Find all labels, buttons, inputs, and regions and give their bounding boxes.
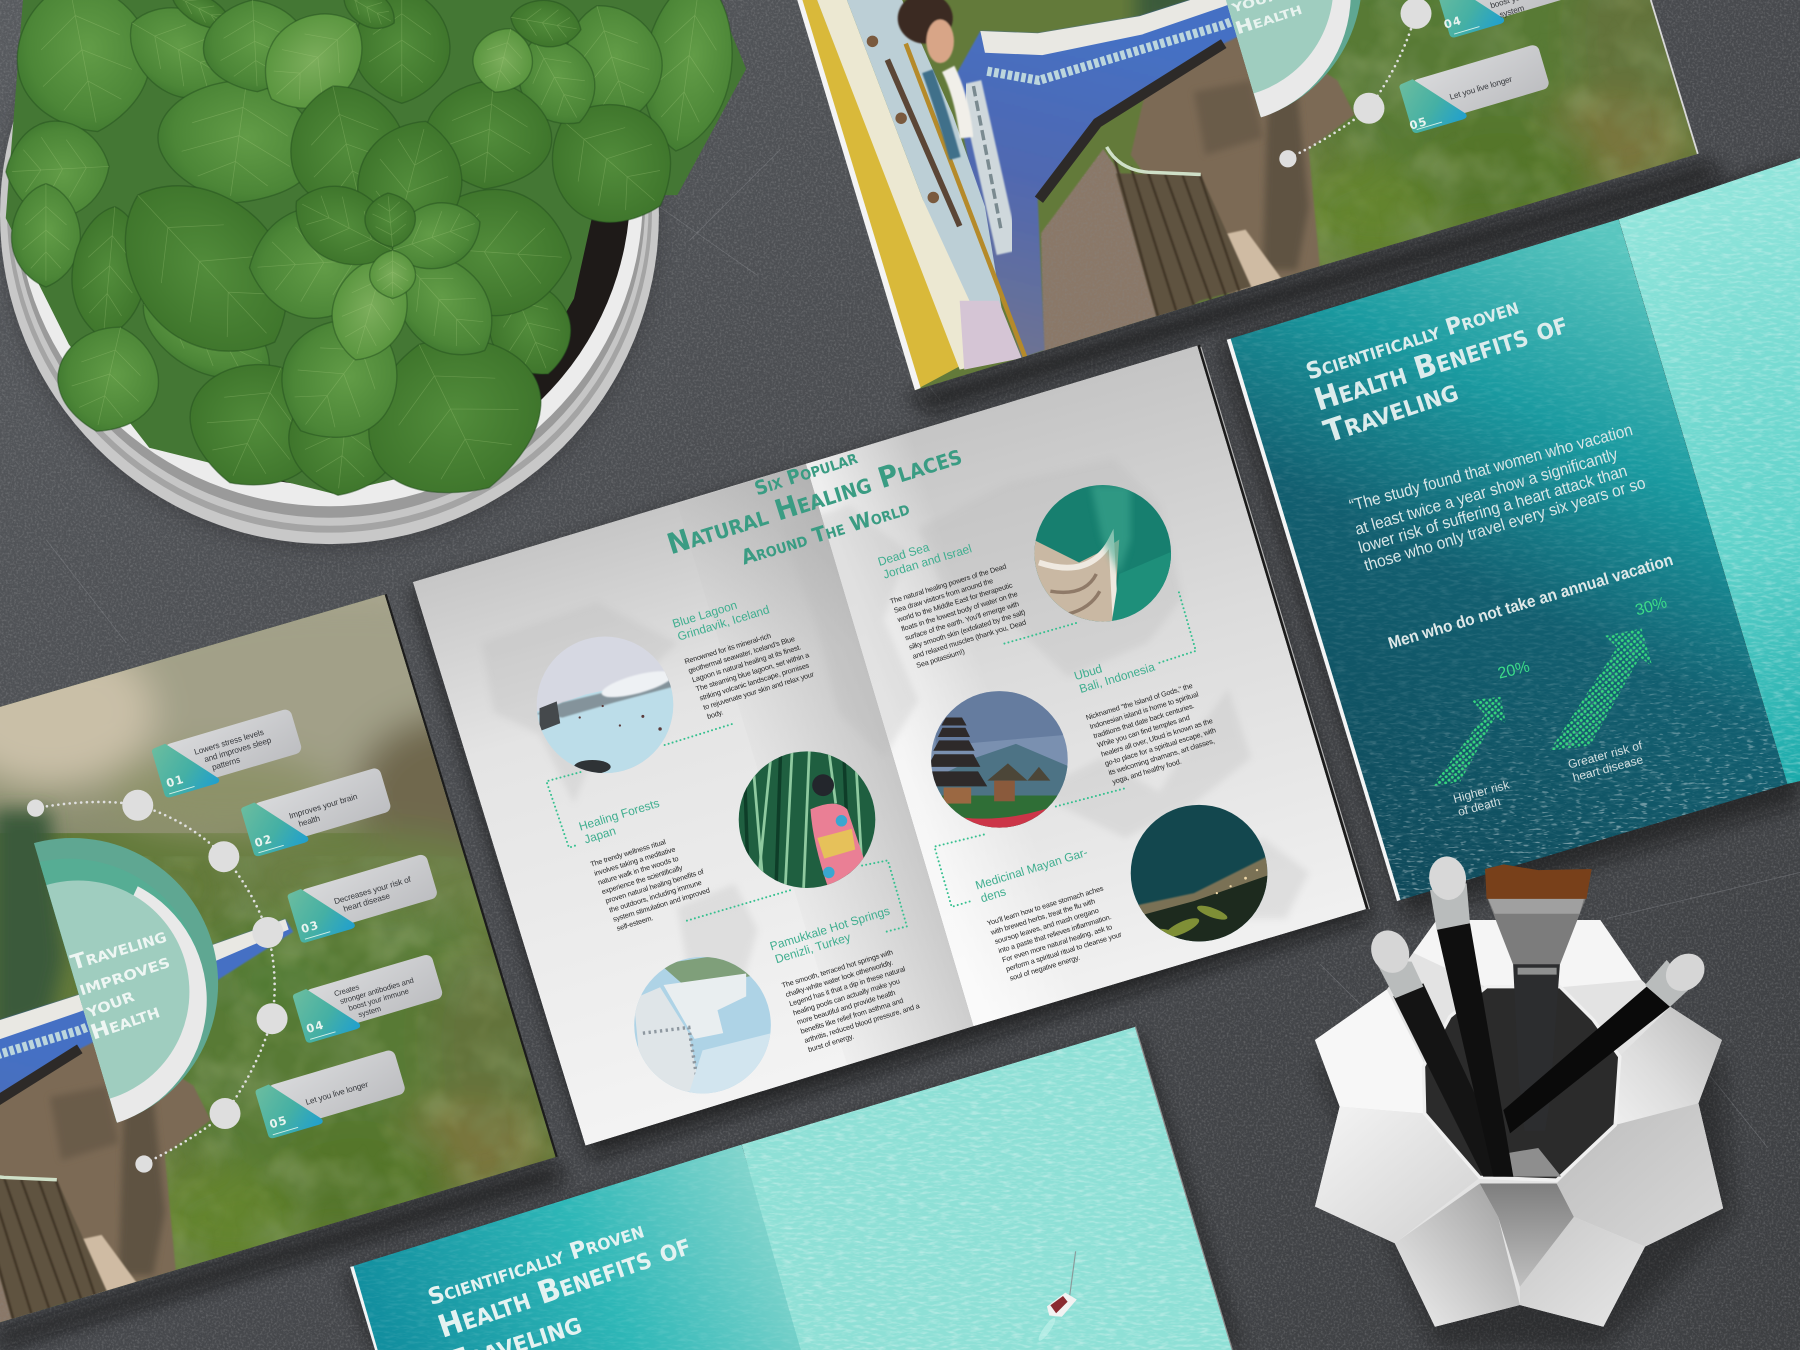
value 30%: 30% <box>1633 593 1669 619</box>
section: Pamukkale: benefits like relief from asthma and <box>799 996 904 1036</box>
card 04 text: stronger antibodies and <box>339 976 415 1006</box>
photo: Pamukkale <box>634 953 771 1096</box>
section: Healing Forests <box>577 796 714 935</box>
photo: train and forest <box>802 0 1697 390</box>
section: Ubud: Ubud <box>1072 661 1104 683</box>
card 01 text <box>164 726 276 790</box>
section: Medicinal Mayan Gardens: with brewed herbs, treat the flu with <box>989 896 1096 937</box>
label greater risk: Greater risk of <box>1566 738 1644 772</box>
heading: Health Benefits of <box>1310 305 1572 418</box>
circle heading: improves <box>76 948 173 1000</box>
card 01 text: and improves sleep <box>203 736 273 764</box>
card 02 text: Improves your brain <box>288 792 358 821</box>
section: Dead Sea: world to the Middle East for therapeutic <box>895 580 1014 624</box>
section: Pamukkale: burst of energy. <box>807 1032 855 1054</box>
section: Blue Lagoon: to rejuvenate your skin and relax your <box>702 669 816 712</box>
page: pale water right page <box>1607 149 1800 792</box>
section: Ubud: healers all over, Ubud is known as the <box>1100 716 1214 759</box>
section: Pamukkale: Pamukkale Hot Springs <box>768 904 891 953</box>
section: Dead Sea: Jordan and Israel <box>881 541 973 582</box>
statistic heading: Men who do not take an annual vacation <box>1386 550 1675 653</box>
section: Pamukkale <box>768 904 925 1056</box>
section: Healing Forests: experience the scientifically <box>600 863 684 896</box>
section: Dead Sea: The natural healing powers of the Dead <box>889 562 1007 606</box>
circle heading: your <box>81 982 137 1023</box>
value 20%: 20% <box>1496 657 1531 683</box>
circle heading: Traveling <box>68 923 169 975</box>
section: Healing Forests: system stimulation and improved <box>612 886 711 924</box>
photo: Ubud, Bali <box>928 690 1070 832</box>
leaves <box>3 0 746 527</box>
section: Pamukkale: arthritis, reduced blood pressure, and a <box>803 1001 922 1045</box>
booklet: center spread, natural healing places <box>412 346 1372 1159</box>
section: Blue Lagoon: Blue Lagoon <box>671 598 739 631</box>
section: Ubud <box>1072 646 1223 788</box>
card 04 text: boost your immune <box>347 986 410 1013</box>
photo: forest and train <box>0 546 624 1350</box>
section: Dead Sea <box>876 528 1032 672</box>
page: teal left page <box>1217 207 1800 918</box>
section: Dead Sea: silky smooth skin (exfoliated by the salt) <box>908 607 1026 652</box>
top spread text: Health <box>1233 0 1305 39</box>
section: Dead Sea: Sea draw visitors from around the <box>893 576 994 615</box>
section: Pamukkale: Legend has it that a dip in these natural <box>788 964 907 1008</box>
section: Blue Lagoon: Renowned for its mineral-rich <box>683 631 772 666</box>
section: Pamukkale: chalky-white water look otherworldly. <box>784 958 894 999</box>
section: Dead Sea: and relaxed muscles (thank you, Dead <box>911 618 1027 661</box>
page: pale water right page <box>735 1022 1240 1350</box>
section: Blue Lagoon <box>671 589 820 723</box>
section: Medicinal Mayan Gardens: You'll learn how to ease stomach aches <box>986 884 1104 928</box>
label higher risk: of death <box>1456 794 1502 819</box>
heading: Scientifically Proven <box>425 1217 647 1311</box>
dotted arrow 20 percent <box>1432 697 1506 786</box>
card 04 text: Creates <box>333 982 360 998</box>
booklet: right teal spread <box>1217 149 1800 918</box>
quote: at least twice a year show a significantly <box>1353 444 1620 539</box>
section: Blue Lagoon: Grindavik, Iceland <box>676 602 771 644</box>
card 02 text: health <box>298 814 321 829</box>
section: Healing Forests: self-esteem. <box>616 913 654 933</box>
section: Ubud: Nicknamed "the Island of Gods," the <box>1085 681 1194 722</box>
section: Ubud: go-to place for a spiritual escape, with <box>1104 725 1217 768</box>
section: Dead Sea: floats in the lowest body of water on the <box>900 589 1019 633</box>
section: Ubud: Indonesian island is home to spiritual <box>1088 689 1200 731</box>
quote <box>1347 420 1648 575</box>
section: Healing Forests: the outdoors, including immune <box>608 878 703 914</box>
card 05 text <box>268 1080 370 1131</box>
circle heading <box>68 923 173 1044</box>
booklet: bottom teal cover with sailboat <box>344 1022 1240 1350</box>
card 02 text <box>253 792 362 850</box>
section: Blue Lagoon: body. <box>706 707 724 721</box>
top spread text <box>1228 0 1558 133</box>
heading: Traveling <box>1319 372 1463 450</box>
section: Healing Forests: involves taking a meditative <box>593 844 676 878</box>
section: Medicinal Mayan Gardens: soursop leaves, and mash oregano <box>993 906 1100 946</box>
top spread text: system <box>1498 4 1526 19</box>
section: Medicinal Mayan Gardens: dens <box>979 884 1008 905</box>
section: Medicinal Mayan Gardens: soul of negative energy. <box>1008 953 1081 983</box>
card 03 text: heart disease <box>342 891 392 914</box>
holder body <box>1315 920 1723 1327</box>
booklet: top train spread <box>797 0 1725 420</box>
photo: Healing Forests <box>738 751 876 890</box>
circle heading: Health <box>87 999 162 1044</box>
photo: Blue Lagoon <box>536 636 675 774</box>
brush <box>1485 864 1592 1131</box>
quote: lower risk of suffering a heart attack than <box>1356 461 1629 557</box>
section: Pamukkale: The smooth, terraced hot springs with <box>781 947 894 990</box>
heading: Health Benefits of <box>434 1226 695 1346</box>
card 03 text: Decreases your risk of <box>333 875 412 906</box>
pot <box>0 0 659 550</box>
section: Blue Lagoon: The steaming blue lagoon, set within a <box>695 650 811 693</box>
section: Healing Forests: Healing Forests <box>577 796 661 834</box>
plant in white pot <box>0 0 746 550</box>
section: Dead Sea: Sea potassium!) <box>915 647 966 670</box>
title: Natural Healing Places <box>663 437 966 561</box>
infographic graphics on top spread <box>1226 0 1561 168</box>
section: Dead Sea: Dead Sea <box>876 540 931 569</box>
photo: Medicinal Mayan Gardens <box>1130 804 1270 944</box>
section: Medicinal Mayan Gardens: perform a spiritual ritual to cleanse your <box>1005 929 1123 973</box>
pen holder with pencils and brush <box>1314 854 1733 1349</box>
section: Healing Forests: Japan <box>582 824 617 846</box>
card 01 text: Lowers stress levels <box>193 728 265 757</box>
heading: Scientifically Proven <box>1303 294 1522 385</box>
card 04 text: system <box>357 1004 382 1019</box>
dotted arrow 30 percent <box>1550 629 1653 751</box>
pencil right <box>1503 946 1712 1133</box>
card 05 text: 05 <box>268 1113 289 1131</box>
dotted connectors <box>546 592 1196 932</box>
section: Healing Forests: nature walk in the woods to <box>597 854 680 887</box>
section: Blue Lagoon: geothermal seawater, Iceland's Blue <box>687 634 796 675</box>
top spread text: 04 <box>1442 13 1464 32</box>
section: Pamukkale: more beautiful and provide health <box>796 988 896 1027</box>
card 04 text: 04 <box>305 1017 326 1036</box>
card 02 text: 02 <box>253 831 274 850</box>
section: Ubud: traditions that date back centuries. <box>1092 701 1195 740</box>
sailboat <box>1036 1251 1077 1343</box>
section: Ubud: its welcoming shamans, art classes, <box>1107 736 1216 777</box>
photo: Dead Sea <box>1033 484 1173 626</box>
booklet: left train spread with health benefits <box>0 546 624 1350</box>
section: Pamukkale: healing pools can actually make you <box>792 976 901 1017</box>
top spread text: 05 <box>1408 114 1429 133</box>
card 01 text: 01 <box>164 772 186 790</box>
card 03 text: 03 <box>299 918 321 936</box>
section: Medicinal Mayan Gardens: For even more natural healing, ask to <box>1001 922 1113 964</box>
section: Ubud: Bali, Indonesia <box>1078 660 1157 696</box>
section: Medicinal Mayan Gardens: into a paste that relieves inflammation. <box>997 912 1112 955</box>
card 01 text: patterns <box>211 755 241 772</box>
card 05 text: Let you live longer <box>305 1080 370 1107</box>
circle, path and cards <box>0 707 445 1173</box>
section: Dead Sea: surface of the earth. You'll emerge with <box>904 599 1020 642</box>
section: Healing Forests: proven natural healing benefits of <box>604 867 706 905</box>
top spread text: Let you live longer <box>1448 75 1513 102</box>
page: teal left page <box>344 1136 809 1350</box>
title: Six Popular <box>752 445 860 500</box>
section: Blue Lagoon: Lagoon is natural healing at its finest. <box>691 642 802 684</box>
pencil left <box>1364 924 1513 1177</box>
section: Pamukkale: Denizli, Turkey <box>773 930 852 966</box>
section: Ubud: While you can find temples and <box>1096 713 1191 750</box>
quote: “The study found that women who vacation <box>1347 420 1635 515</box>
section: Medicinal Mayan Gardens <box>974 845 1126 984</box>
section: Healing Forests: The trendy wellness ritual <box>589 837 667 869</box>
pencil middle <box>1426 854 1513 1177</box>
pages <box>413 346 1366 1146</box>
title: Around The World <box>738 496 912 570</box>
section: Medicinal Mayan Gardens: Medicinal Mayan Gar- <box>974 845 1089 893</box>
card 03 text <box>299 875 415 936</box>
label higher risk: Higher risk <box>1452 778 1511 806</box>
label greater risk: heart disease <box>1571 752 1645 785</box>
section: Blue Lagoon: striking volcanic landscape, promises <box>698 660 811 703</box>
card 04 text <box>305 967 420 1036</box>
section: Ubud: yoga, and healthy food. <box>1111 757 1183 786</box>
quote: those who only travel every six years or so <box>1362 473 1648 575</box>
